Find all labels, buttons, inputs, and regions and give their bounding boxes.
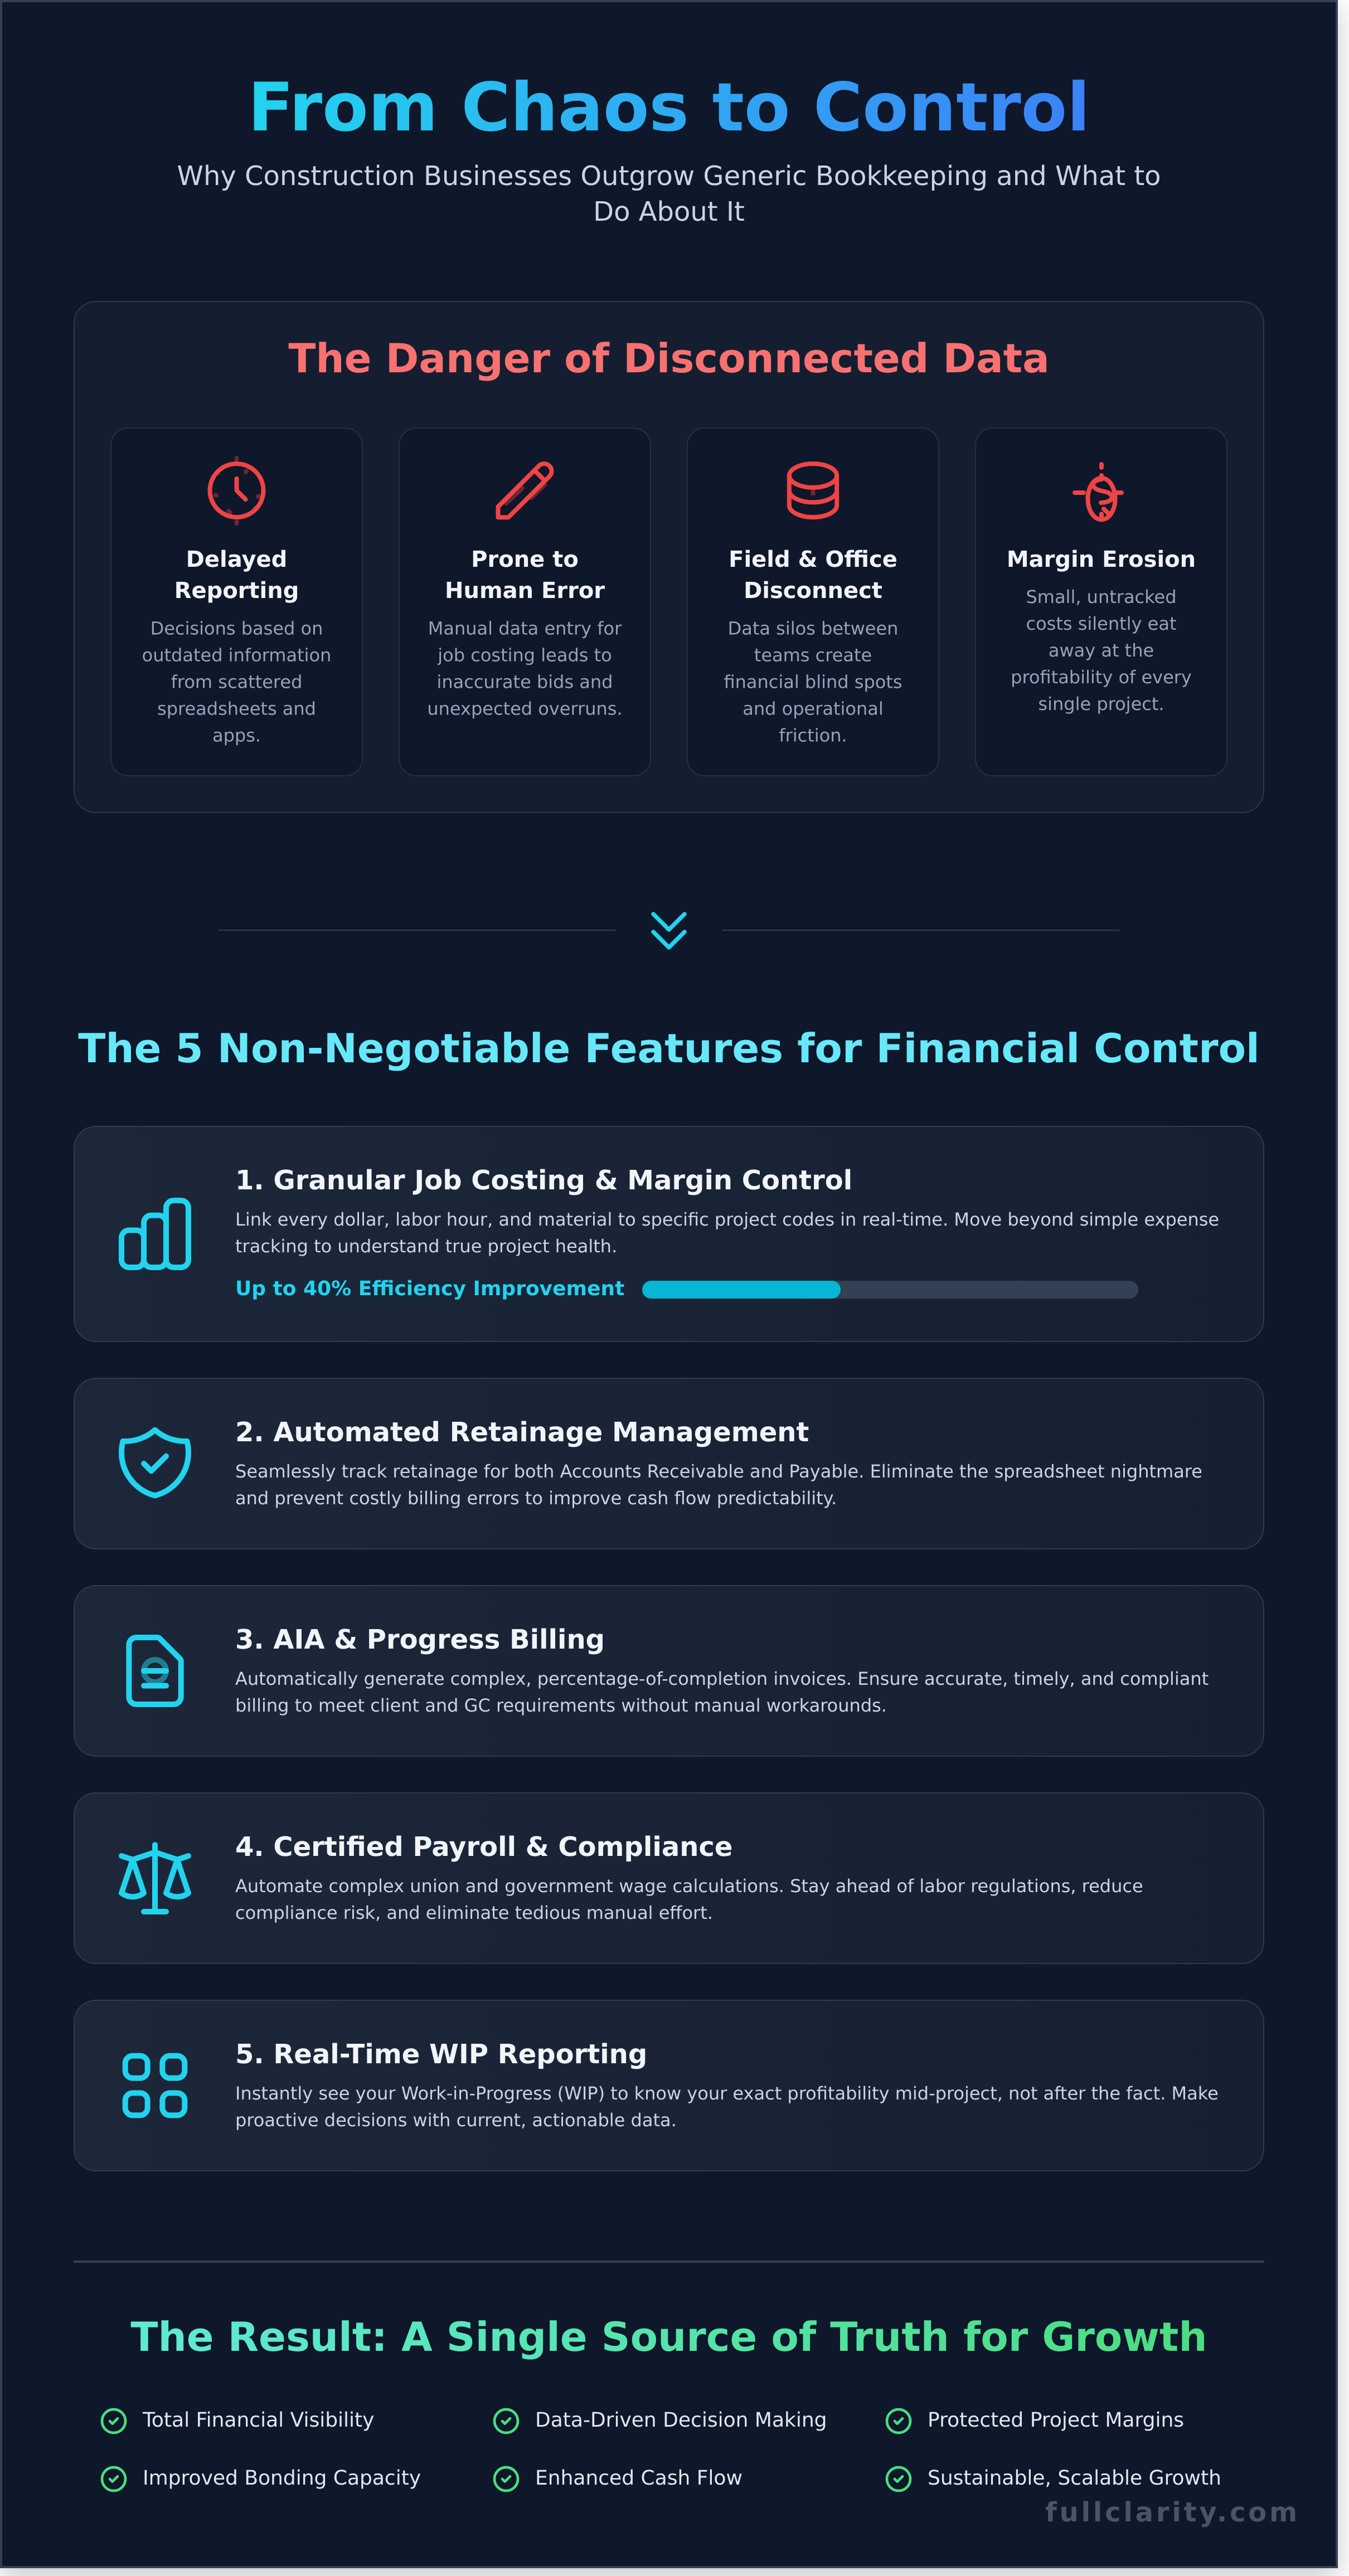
panel: the danger of disconnected data bbox=[74, 302, 1264, 813]
card text: friction. bbox=[779, 725, 847, 746]
feature text: Link every dollar, labor hour, and material to specific project codes in real-time. Move beyond simple expense bbox=[235, 1209, 1219, 1230]
result: enhanced cash flow: Enhanced Cash Flow bbox=[535, 2467, 743, 2490]
feature 4: payroll bbox=[74, 1793, 1264, 1963]
progress bar bbox=[642, 1281, 1138, 1299]
result: protected project margins: Protected Project Margins bbox=[928, 2409, 1184, 2432]
subtitle: Do About It bbox=[593, 196, 745, 227]
feature text: Automatically generate complex, percentage-of-completion invoices. Ensure accurate, timely, and compliant bbox=[235, 1668, 1209, 1689]
result: improved bonding capacity: Improved Bonding Capacity bbox=[143, 2467, 421, 2490]
feature 1: job costing bbox=[74, 1126, 1264, 1342]
feature text: billing to meet client and GC requirements without manual workarounds. bbox=[235, 1695, 887, 1716]
card text: costs silently eat bbox=[1026, 613, 1177, 634]
card: delayed reporting bbox=[111, 428, 362, 776]
card text: outdated information bbox=[142, 644, 331, 665]
watermark: fullclarity.com bbox=[1045, 2497, 1300, 2528]
result: total financial visibility: Total Financial Visibility bbox=[142, 2409, 374, 2432]
divider with chevrons bbox=[219, 914, 1119, 947]
card text: Data silos between bbox=[728, 618, 898, 639]
panel heading: The Danger of Disconnected Data bbox=[288, 335, 1050, 382]
card title: Field & Office bbox=[729, 547, 897, 572]
feature text: compliance risk, and eliminate tedious manual effort. bbox=[235, 1902, 713, 1923]
feature title: 3. AIA & Progress Billing bbox=[235, 1624, 605, 1655]
feature title: 5. Real-Time WIP Reporting bbox=[235, 2039, 647, 2070]
card text: single project. bbox=[1038, 693, 1164, 715]
feature text: tracking to understand true project health. bbox=[235, 1236, 617, 1257]
card text: apps. bbox=[212, 725, 261, 746]
title: From Chaos to Control bbox=[248, 69, 1090, 147]
feature title: 1. Granular Job Costing & Margin Control bbox=[235, 1165, 852, 1196]
card text: Decisions based on bbox=[151, 618, 323, 639]
feature title: 4. Certified Payroll & Compliance bbox=[235, 1831, 732, 1863]
card text: from scattered bbox=[171, 671, 302, 692]
feature 3: billing bbox=[74, 1586, 1264, 1756]
result: sustainable scalable growth: Sustainable, Scalable Growth bbox=[928, 2467, 1221, 2490]
card: margin erosion bbox=[976, 428, 1227, 776]
feature text: and prevent costly billing errors to improve cash flow predictability. bbox=[235, 1488, 837, 1509]
card text: teams create bbox=[754, 644, 872, 665]
card title: Disconnect bbox=[744, 578, 882, 604]
card text: financial blind spots bbox=[724, 671, 902, 692]
section heading: features: The 5 Non-Negotiable Features for Financial Control bbox=[78, 1025, 1260, 1072]
feature title: 2. Automated Retainage Management bbox=[235, 1417, 809, 1448]
result list bbox=[102, 2409, 1221, 2491]
icon: eroding dollar bbox=[1075, 464, 1122, 519]
card title: Prone to bbox=[471, 547, 579, 572]
feature text: Instantly see your Work-in-Progress (WIP) to know your exact profitability mid-project, not after the fact. Make bbox=[235, 2083, 1219, 2104]
card: field and office disconnect bbox=[687, 428, 939, 776]
card title: Human Error bbox=[445, 578, 605, 604]
icon: database bbox=[789, 464, 837, 517]
progress label: Up to 40% Efficiency Improvement bbox=[235, 1277, 624, 1300]
subtitle: Why Construction Businesses Outgrow Generic Bookkeeping and What to bbox=[177, 161, 1161, 192]
result heading: The Result: A Single Source of Truth for Growth bbox=[130, 2313, 1207, 2360]
card text: Small, untracked bbox=[1026, 586, 1177, 607]
feature text: Automate complex union and government wage calculations. Stay ahead of labor regulations, reduce bbox=[235, 1875, 1143, 1897]
feature 5: wip reporting bbox=[74, 2000, 1264, 2171]
card text: and operational bbox=[743, 698, 884, 719]
card: prone to human error bbox=[399, 428, 651, 776]
card text: away at the bbox=[1049, 640, 1154, 661]
card title: Margin Erosion bbox=[1007, 547, 1196, 572]
feature text: Seamlessly track retainage for both Accounts Receivable and Payable. Eliminate the spreadsheet nightmare bbox=[235, 1461, 1202, 1482]
icon: scales bbox=[122, 1845, 188, 1912]
result: data-driven decision making: Data-Driven Decision Making bbox=[535, 2409, 827, 2432]
icon: clock bbox=[210, 458, 263, 523]
card title: Reporting bbox=[174, 578, 299, 604]
icon: bar chart bbox=[122, 1200, 188, 1267]
icon: grid bbox=[125, 2056, 185, 2115]
icon: document bbox=[129, 1637, 181, 1704]
card text: inaccurate bids and bbox=[437, 671, 613, 692]
card title: Delayed bbox=[186, 547, 287, 572]
feature 2: retainage bbox=[74, 1378, 1264, 1549]
card text: profitability of every bbox=[1011, 667, 1192, 688]
icon: shield check bbox=[122, 1430, 188, 1495]
icon: double chevron down bbox=[653, 914, 685, 947]
card text: spreadsheets and bbox=[157, 698, 316, 719]
card text: job costing leads to bbox=[437, 644, 612, 665]
icon: pencil bbox=[498, 464, 552, 517]
card text: unexpected overruns. bbox=[427, 698, 623, 719]
card text: Manual data entry for bbox=[428, 618, 622, 639]
feature text: proactive decisions with current, actionable data. bbox=[235, 2110, 677, 2131]
